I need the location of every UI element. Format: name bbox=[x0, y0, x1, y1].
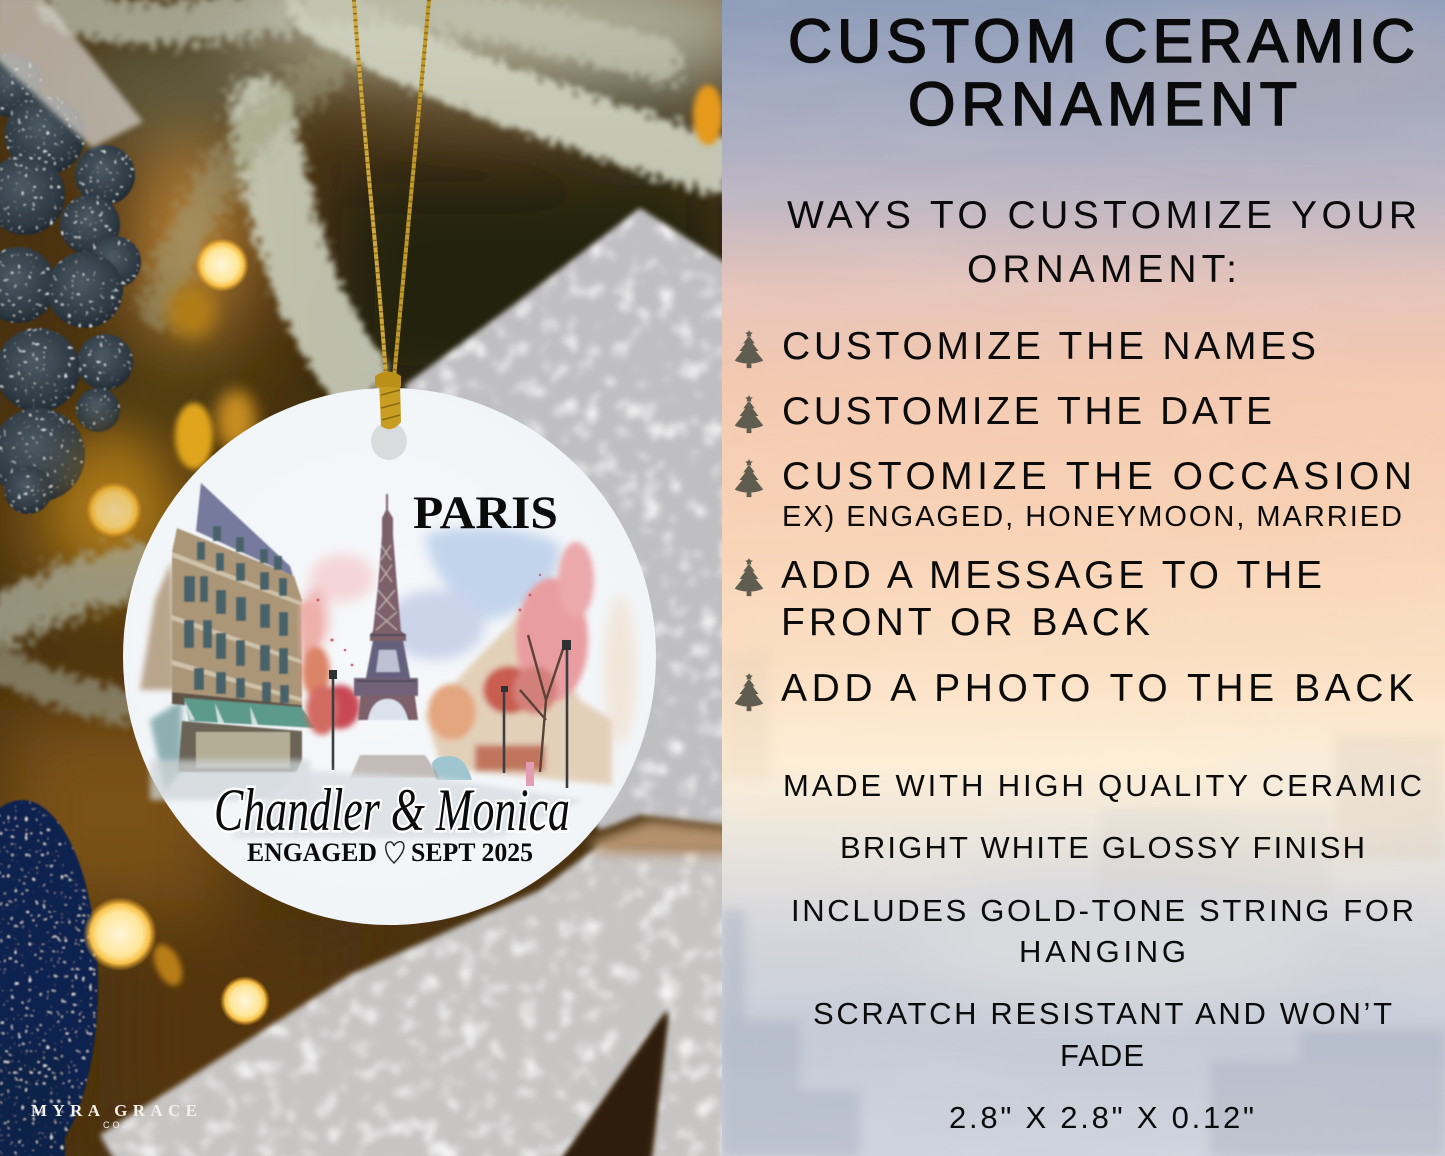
customization list bbox=[735, 325, 1414, 711]
white organza ribbon bbox=[0, 0, 143, 148]
product features: INCLUDES GOLD-TONE STRING FOR bbox=[791, 893, 1414, 928]
text: PARIS: PARIS bbox=[413, 487, 558, 539]
blue glitter bauble bbox=[0, 800, 98, 1156]
ceramic ornament bbox=[123, 388, 656, 925]
street trees and right-hand buildings bbox=[230, 542, 612, 838]
list item: occasion bbox=[735, 455, 1412, 533]
ornament hanging hole bbox=[371, 422, 407, 460]
list item: date: CUSTOMIZE THE DATE bbox=[782, 390, 1272, 433]
heading: CUSTOM CERAMIC bbox=[788, 7, 1415, 75]
gold hanging string bbox=[354, 0, 429, 378]
list item: occasion: CUSTOMIZE THE OCCASION bbox=[782, 455, 1412, 498]
glittered bauble cluster bbox=[0, 53, 141, 514]
photo panel: ornament on a Christmas tree bbox=[0, 0, 722, 1156]
product features: MADE WITH HIGH QUALITY CERAMIC bbox=[783, 768, 1422, 803]
frosted pine branches bbox=[0, 0, 715, 708]
brand logo: CO. bbox=[103, 1120, 125, 1130]
text: occasion and date bbox=[247, 838, 533, 867]
icon: outline heart bbox=[386, 842, 404, 863]
brand logo: MYRA GRACE bbox=[31, 1101, 197, 1120]
text: couple names: Chandler & Monica bbox=[214, 777, 570, 843]
list item: message: FRONT OR BACK bbox=[781, 601, 1150, 644]
text: occasion and date: SEPT 2025 bbox=[411, 838, 533, 867]
product features bbox=[783, 768, 1422, 1135]
list item: occasion: EX) ENGAGED, HONEYMOON, MARRIED bbox=[782, 501, 1402, 533]
product features: SCRATCH RESISTANT AND WON’T bbox=[813, 996, 1392, 1031]
sky watercolor wash bbox=[302, 528, 636, 745]
product features: 2.8" X 2.8" X 0.12" bbox=[949, 1100, 1254, 1135]
product features: BRIGHT WHITE GLOSSY FINISH bbox=[840, 830, 1365, 865]
heading bbox=[788, 7, 1415, 138]
list item: message: ADD A MESSAGE TO THE bbox=[781, 554, 1322, 597]
list item: photo: ADD A PHOTO TO THE BACK bbox=[781, 667, 1414, 710]
product features: FADE bbox=[1060, 1038, 1144, 1073]
list item: message bbox=[735, 554, 1322, 644]
subheading: WAYS TO CUSTOMIZE YOUR bbox=[787, 194, 1417, 237]
text panel: product details bbox=[722, 0, 1445, 1156]
bokeh lights bbox=[65, 85, 723, 1026]
faint city silhouette bbox=[722, 650, 1445, 1156]
apartment building and cafe bbox=[140, 483, 316, 800]
heading: ORNAMENT bbox=[908, 70, 1297, 138]
gold string knot bbox=[375, 372, 401, 429]
subheading: ORNAMENT: bbox=[967, 248, 1237, 291]
list item: names: CUSTOMIZE THE NAMES bbox=[782, 325, 1316, 368]
blurred background bbox=[0, 0, 800, 1156]
brand logo bbox=[31, 1101, 197, 1130]
watercolor sky background bbox=[722, 0, 1445, 1156]
text: occasion and date: ENGAGED bbox=[247, 838, 377, 867]
subheading bbox=[787, 194, 1417, 291]
product features: HANGING bbox=[1019, 934, 1186, 969]
silver glitter ribbon bbox=[100, 208, 760, 1156]
Eiffel Tower bbox=[354, 494, 418, 720]
